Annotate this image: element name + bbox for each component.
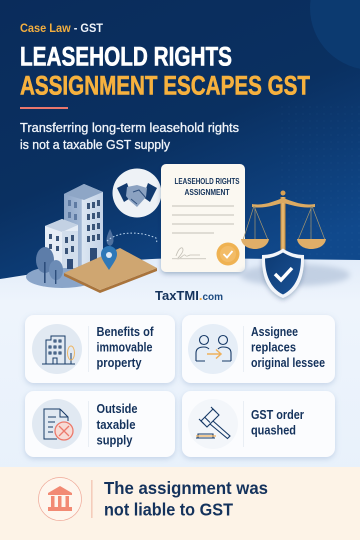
footer panel: [0, 467, 360, 540]
card: assignee replaces original lessee: original lessee: [251, 356, 325, 370]
icon: handshake badge: [112, 168, 162, 218]
card: GST order quashed: [182, 391, 335, 457]
icon: map pin: [101, 246, 117, 270]
card: GST order quashed: quashed: [251, 424, 296, 438]
card: benefits of immovable property: immovable: [96, 340, 153, 354]
icon: short building: [45, 219, 78, 269]
conclusion text: not liable to GST: [104, 500, 233, 520]
brand logo text: TaxTMI.com: [155, 288, 223, 303]
card: GST order quashed: GST order: [251, 408, 304, 422]
subtitle: is not a taxable GST supply: [20, 137, 170, 152]
card: outside taxable supply: taxable: [96, 418, 136, 432]
dotted path: [107, 233, 157, 244]
card: assignee replaces original lessee: [182, 315, 335, 383]
icon: gold seal: [216, 242, 240, 266]
illustration: buildings and land plot: [26, 184, 157, 293]
category label: Case Law - GST: [20, 23, 103, 35]
icon: document with cross: [44, 409, 73, 440]
card: outside taxable supply: supply: [96, 434, 133, 448]
conclusion text: [104, 478, 268, 520]
light lower background: [0, 258, 360, 480]
card: outside taxable supply: Outside: [96, 402, 138, 416]
icon: building and tree: [42, 336, 75, 364]
card: assignee replaces original lessee: Assignee: [251, 325, 298, 339]
card: outside taxable supply: [25, 391, 175, 457]
icon: scales of justice: [241, 190, 326, 255]
card: assignee replaces original lessee: replaces: [251, 340, 296, 354]
card: benefits of immovable property: property: [96, 356, 142, 370]
card: benefits of immovable property: Benefits of: [96, 325, 154, 339]
title: LEASEHOLD RIGHTS: [20, 42, 232, 72]
accent rule: [20, 107, 68, 109]
title: [20, 42, 310, 100]
land plot: [64, 268, 157, 293]
icon: two people with arrow: [196, 336, 231, 361]
icon: shield with check: [240, 248, 350, 298]
document: assignment certificate: ASSIGNMENT: [184, 188, 230, 197]
document: assignment certificate: LEASEHOLD RIGHTS: [174, 177, 240, 186]
subtitle: Transferring long-term leasehold rights: [20, 120, 239, 135]
header background: [0, 0, 360, 300]
icon: trees: [36, 229, 114, 284]
icon: tall tower: [64, 184, 103, 268]
conclusion text: The assignment was: [104, 478, 268, 498]
icon: courthouse badge: [38, 478, 82, 520]
icon: gavel: [196, 407, 230, 438]
card: benefits of immovable property: [25, 315, 175, 383]
document: assignment certificate: [161, 164, 245, 272]
subtitle: [20, 120, 239, 152]
